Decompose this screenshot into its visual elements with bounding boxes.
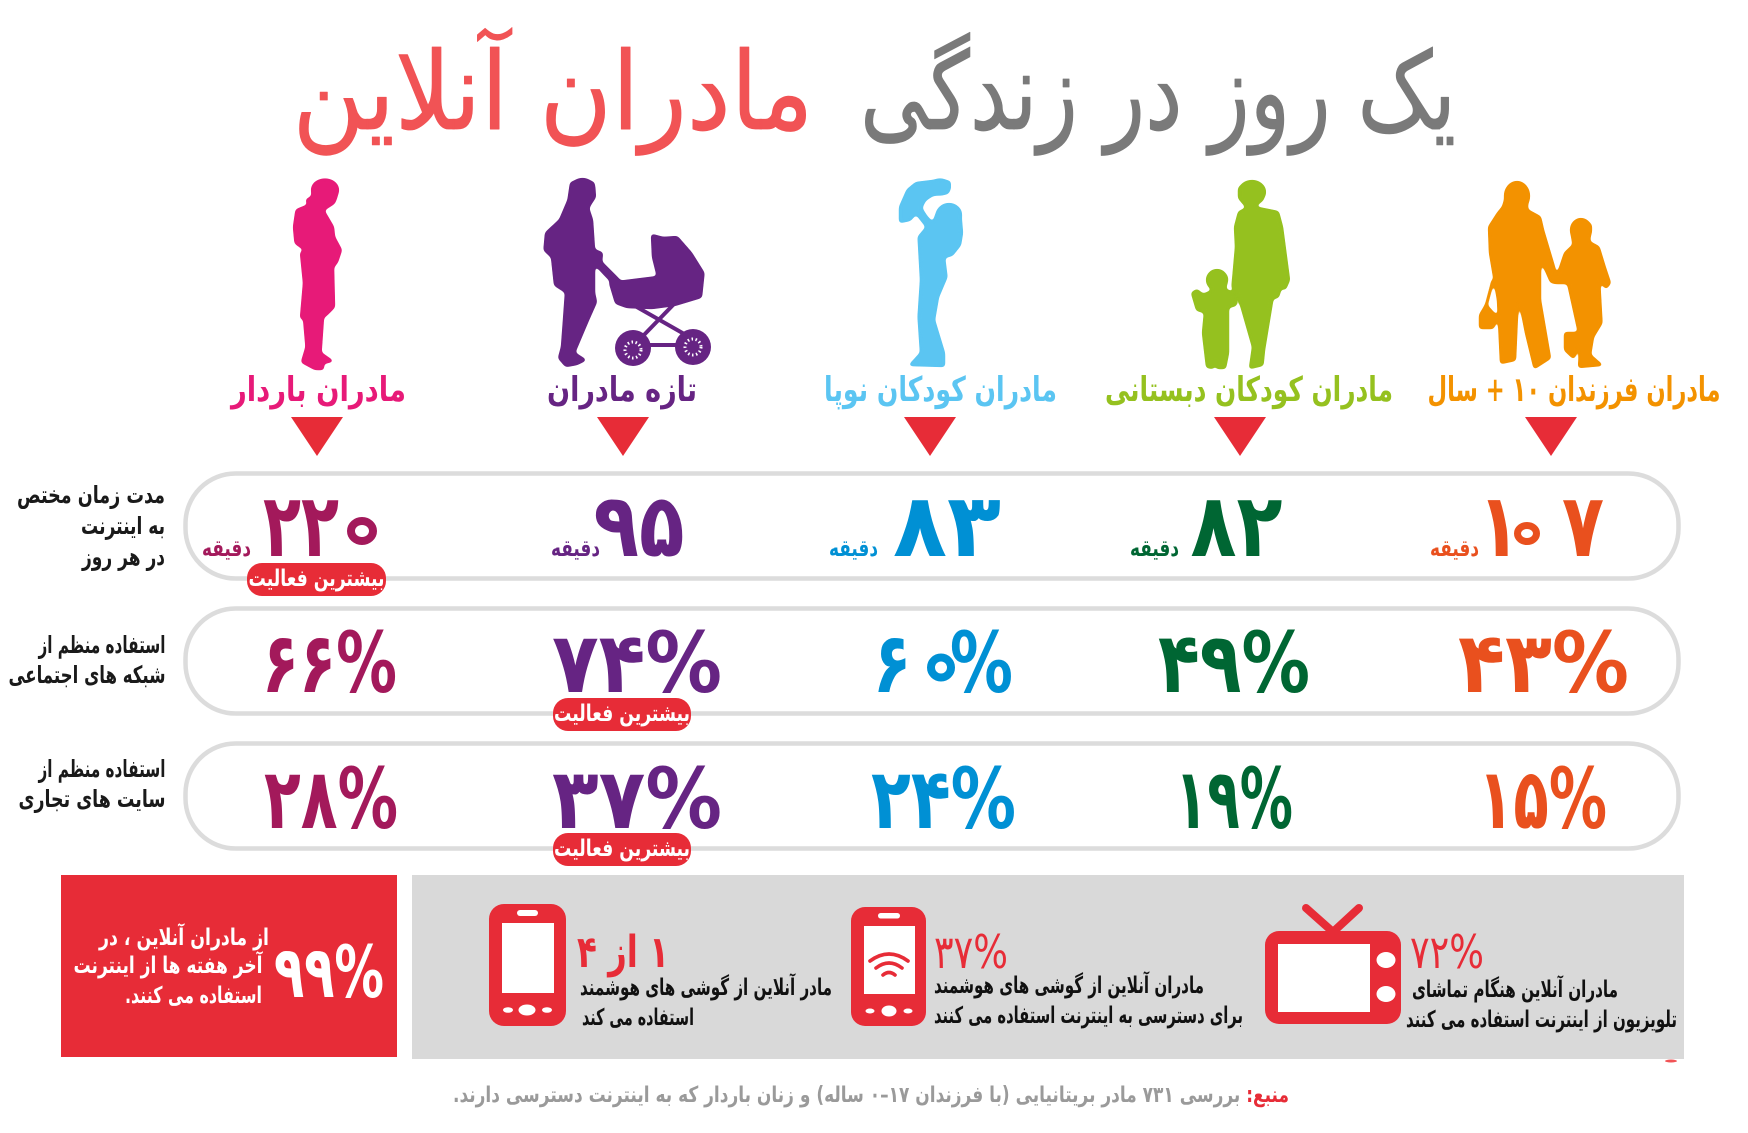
text: tv viewers	[1406, 974, 1677, 1033]
arrows: red triangles	[291, 417, 1577, 456]
row label: مدت زمان مختص	[17, 481, 165, 509]
callout text: از مادران آنلاین ، در	[98, 922, 269, 951]
row label: در هر روز	[81, 543, 165, 571]
text: smartphone internet access: برای دسترسی به اینترنت استفاده می کنند	[934, 1003, 1243, 1029]
title: مادران آنلاین	[292, 27, 814, 155]
icon: new mother with stroller silhouette	[544, 179, 711, 366]
panel: social networks row: ۶۶%	[262, 614, 397, 712]
row label: سایت های تجاری	[18, 785, 166, 813]
panel: social networks row	[8, 608, 1678, 731]
callout text: استفاده می کنند.	[125, 983, 262, 1009]
row label	[18, 755, 166, 813]
panel: devices grey box	[412, 875, 1684, 1059]
group labels: مادران کودکان نوپا	[824, 370, 1057, 410]
icon: preschool mother and child silhouette	[1192, 181, 1289, 368]
badge: most activity: بیشترین فعالیت	[554, 701, 690, 727]
panel: 99% red callout	[61, 875, 397, 1057]
panel: time online row: ۸۳	[893, 474, 1001, 577]
icon: toddler mother silhouette	[900, 180, 962, 366]
text: smartphone users: استفاده می کند	[582, 1005, 694, 1031]
panel: time online row: دقیقه	[202, 536, 251, 562]
panel: time online row: ۲۲۰	[263, 474, 377, 577]
panel: commerce sites row: ۱۹%	[1175, 750, 1293, 848]
row label: به اینترنت	[81, 512, 165, 540]
panel: time online row: دقیقه	[1130, 536, 1179, 562]
icon: smartphone with wifi	[851, 907, 926, 1026]
panel: social networks row: ۴۹%	[1158, 614, 1310, 712]
group labels	[229, 370, 1720, 410]
panel: commerce sites row: ۲۴%	[871, 750, 1016, 848]
callout text: آخر هفته ها از اینترنت	[74, 950, 263, 979]
panel: commerce sites row: ۲۸%	[264, 750, 398, 848]
group labels: مادران کودکان دبستانی	[1105, 370, 1393, 410]
panel: 99% red callout: ۹۹%	[274, 930, 384, 1014]
icon: pregnant mother silhouette	[294, 180, 341, 369]
panel: social networks row: ۷۴%	[552, 614, 722, 712]
text: smartphone internet access: مادران آنلاین از گوشی های هوشمند	[934, 970, 1204, 999]
panel: social networks row: ۴۳%	[1458, 614, 1629, 712]
stat: 37 percent: ۳۷%	[934, 925, 1008, 979]
panel: commerce sites row: ۱۵%	[1478, 750, 1607, 848]
panel: commerce sites row: ۳۷%	[552, 750, 722, 848]
stat: 72 percent: ۷۲%	[1410, 925, 1484, 979]
row label: شبکه های اجتماعی	[8, 661, 166, 689]
panel: time online row: ۱۰۷	[1478, 474, 1604, 577]
panel: commerce sites row	[18, 744, 1678, 866]
text: smartphone internet access	[934, 970, 1243, 1029]
panel: time online row	[17, 474, 1678, 596]
text: smartphone users	[580, 972, 832, 1031]
panel: time online row: دقیقه	[551, 536, 600, 562]
row label: استفاده منظم از	[38, 631, 166, 659]
icon: smartphone	[489, 904, 566, 1026]
panel: time online row: ۸۲	[1190, 474, 1282, 577]
badge: most activity: بیشترین فعالیت	[248, 566, 384, 592]
row label	[8, 631, 166, 689]
panel: time online row: ۹۵	[594, 474, 684, 577]
group labels: مادران باردار	[229, 370, 406, 410]
badge: most activity	[247, 563, 386, 596]
row label: استفاده منظم از	[38, 755, 166, 783]
title	[292, 27, 1456, 156]
callout text	[74, 922, 269, 1009]
panel: time online row: دقیقه	[1430, 536, 1479, 562]
panel: time online row: دقیقه	[829, 536, 878, 562]
badge: most activity: بیشترین فعالیت	[554, 836, 690, 862]
badge: most activity	[553, 698, 691, 731]
text: tv viewers: مادران آنلاین هنگام تماشای	[1412, 974, 1618, 1003]
source line: منبع: بررسی ۷۳۱ مادر بریتانیایی (با فرزندان ۱۷–۰ ساله) و زنان باردار که به اینترنت دسترسی دارند.	[453, 1083, 1289, 1108]
text: smartphone users: مادر آنلاین از گوشی های هوشمند	[580, 972, 832, 1001]
panel: social networks row: ۶۰%	[873, 614, 1013, 712]
icon: mother and older child silhouette	[1480, 182, 1610, 368]
icon: television	[1265, 908, 1401, 1024]
title: یک روز در زندگی	[860, 30, 1456, 156]
stat: one in four: ۱ از ۴	[577, 927, 669, 978]
group labels: تازه مادران	[547, 370, 697, 410]
badge: most activity	[553, 833, 691, 866]
row label	[17, 481, 165, 571]
